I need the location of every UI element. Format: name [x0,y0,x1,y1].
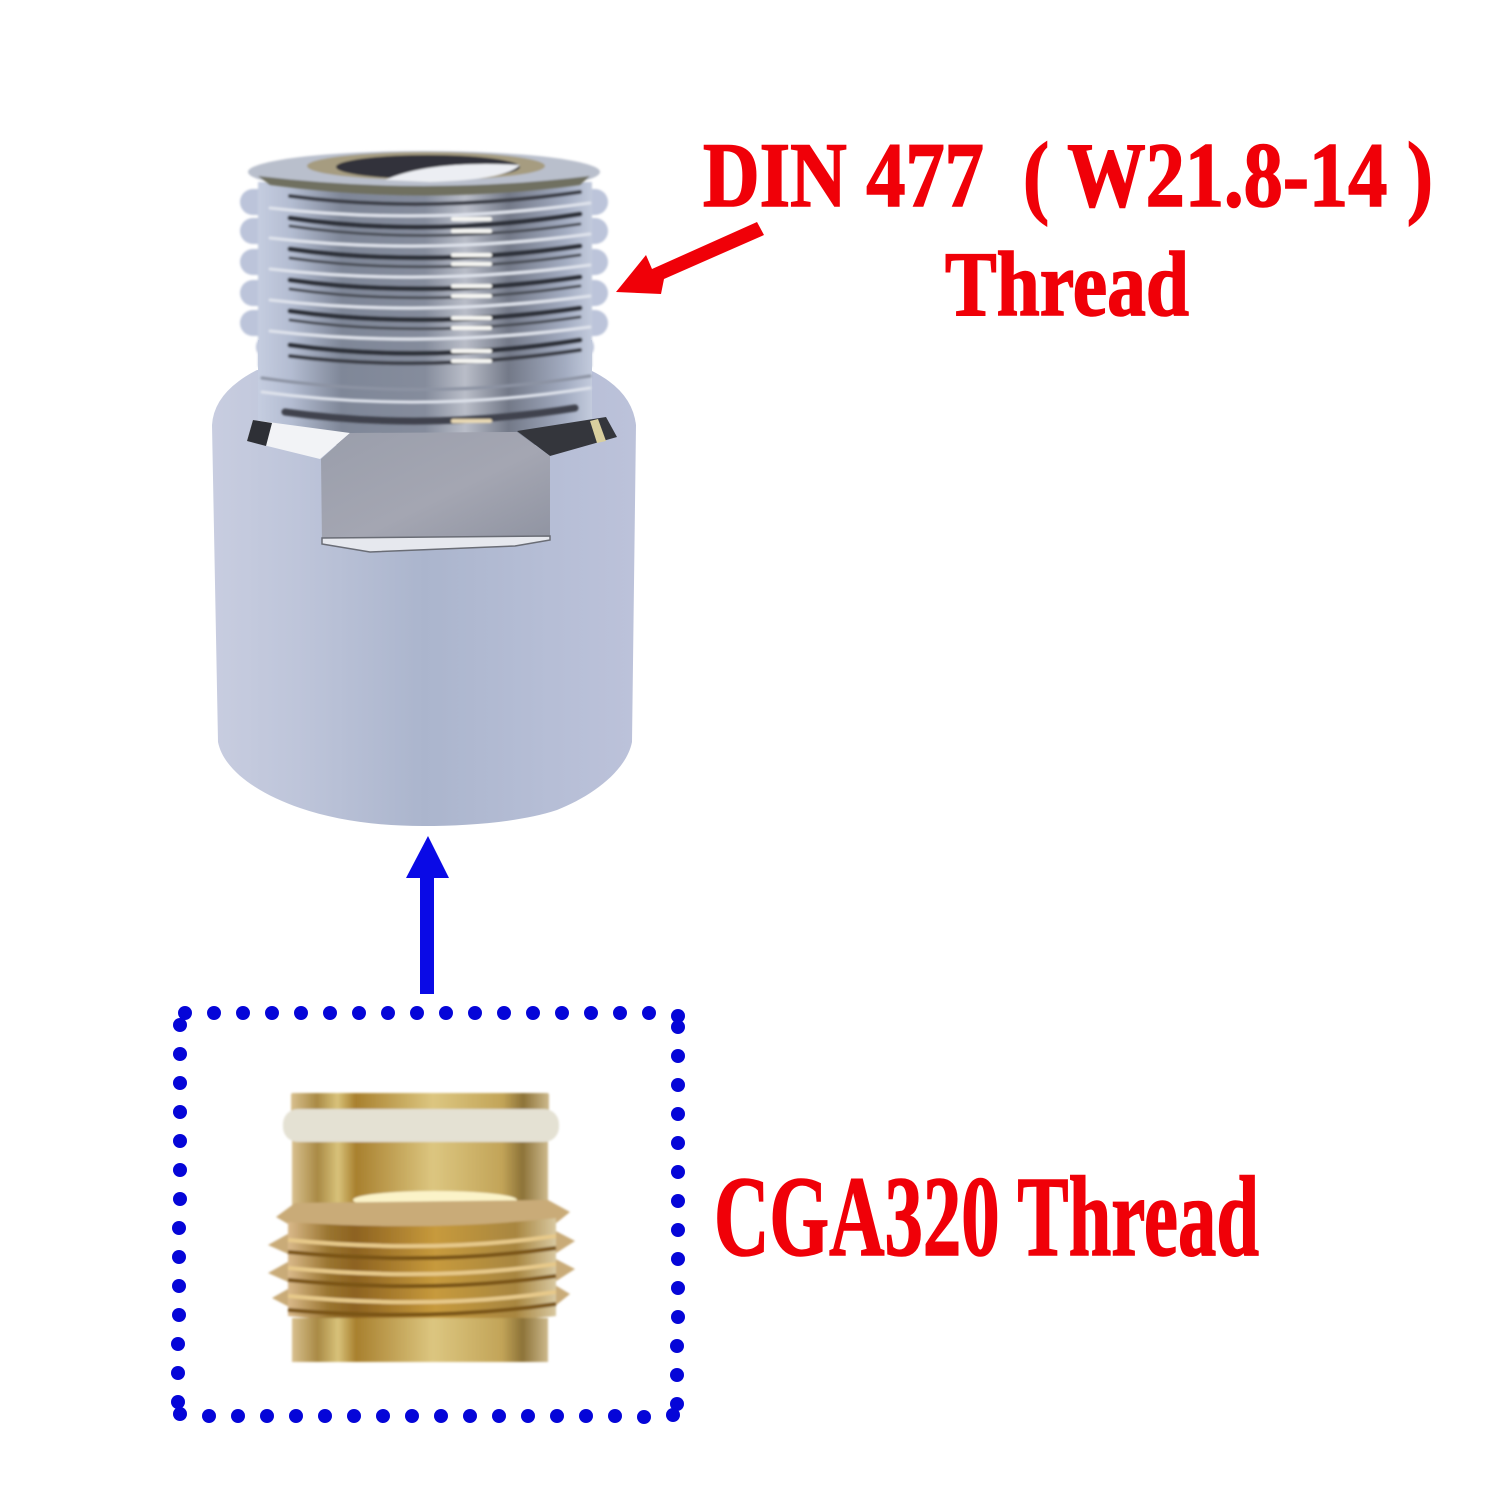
external thread rings [240,182,608,421]
brass top lip [291,1093,549,1113]
flat lower reflection [322,536,550,552]
brass highlight [353,1191,517,1209]
dotted selection box [171,1006,685,1424]
heading: Thread: Thread [945,233,1189,335]
white o-ring [283,1109,559,1142]
hex flat [321,432,550,544]
blue arrow [406,836,449,994]
thread neck [258,340,592,445]
brass upper barrel [292,1135,548,1227]
brass fitting [268,1093,575,1362]
collar right glint [590,419,606,443]
brass thread section [268,1200,575,1323]
adapter cylindrical body [212,370,636,826]
hex collar left chamfer [247,420,350,459]
top rim and bore [248,151,600,196]
brass lower barrel [292,1318,548,1362]
collar left dark glint [247,420,272,446]
red arrow [616,222,764,294]
silver adapter [212,151,636,826]
heading: CGA320 Thread: CGA320 Thread [714,1153,1259,1280]
hex collar right chamfer [517,417,617,456]
